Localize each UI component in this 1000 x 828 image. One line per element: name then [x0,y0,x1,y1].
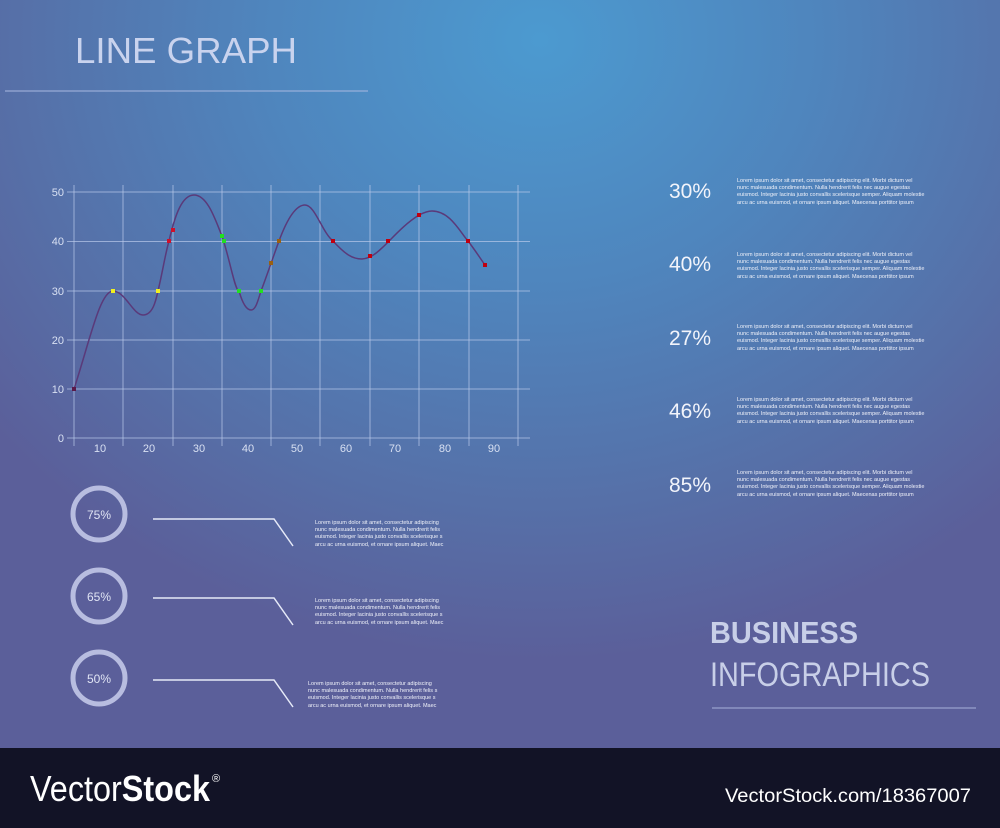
stat 30%: arcu ac urna euismod, et ornare ipsum aliquet. Maecenas porttitor ipsum [737,200,914,206]
stat 40%: euismod. Integer lacinia justo convallis scelerisque semper. Aliquam molestie [737,266,924,272]
stat 40%: nunc malesuada condimentum. Nulla hendrerit felis nec augue egestas [737,259,910,265]
circle item 50% [73,652,438,709]
stat 85% [669,470,924,498]
circle item 65%: Lorem ipsum dolor sit amet, consectetur adipiscing [315,598,439,604]
stat 27%: nunc malesuada condimentum. Nulla hendrerit felis nec augue egestas [737,331,910,337]
stat 40%: Lorem ipsum dolor sit amet, consectetur adipiscing elit. Morbi dictum vel [737,252,912,258]
stat 40%: 40% [669,253,711,276]
y axis labels: 0 [58,433,64,445]
circle item 75% [73,488,444,548]
x axis labels: 40 [242,443,254,455]
business infographics heading: INFOGRAPHICS [710,656,930,694]
business infographics heading: BUSINESS [710,615,858,650]
stat 27%: Lorem ipsum dolor sit amet, consectetur adipiscing elit. Morbi dictum vel [737,324,912,330]
circle item 65%: arcu ac urna euismod, et ornare ipsum aliquet. Maec [315,620,444,626]
circle item 65% [73,570,444,626]
stat 46%: 46% [669,400,711,423]
x axis labels: 50 [291,443,303,455]
circle item 65%: 65% [87,590,111,604]
stat 46%: arcu ac urna euismod, et ornare ipsum aliquet. Maecenas porttitor ipsum [737,419,914,425]
stat 85%: arcu ac urna euismod, et ornare ipsum aliquet. Maecenas porttitor ipsum [737,492,914,498]
line chart [52,185,530,455]
y axis labels: 30 [52,286,64,298]
circle item 65%: nunc malesuada condimentum. Nulla hendrerit felis [315,605,440,611]
stat 27%: euismod. Integer lacinia justo convallis scelerisque semper. Aliquam molestie [737,338,924,344]
footer bar: VectorStock [30,768,211,809]
stat 30% [669,178,924,206]
y axis labels: 20 [52,335,64,347]
x axis labels: 20 [143,443,155,455]
stat 46% [669,397,924,425]
stat 27% [669,324,924,352]
footer bar: ® [212,773,220,785]
footer bar: VectorStock.com/18367007 [725,786,971,807]
stat 30%: euismod. Integer lacinia justo convallis scelerisque semper. Aliquam molestie [737,192,924,198]
stat 27%: 27% [669,327,711,350]
stat 30%: 30% [669,180,711,203]
circle item 50%: 50% [87,672,111,686]
stat 30%: Lorem ipsum dolor sit amet, consectetur adipiscing elit. Morbi dictum vel [737,178,912,184]
stat 30%: nunc malesuada condimentum. Nulla hendrerit felis nec augue egestas [737,185,910,191]
x axis labels: 10 [94,443,106,455]
circle item 65%: euismod. Integer lacinia justo convallis scelerisque s [315,612,443,618]
x axis labels: 70 [389,443,401,455]
y axis labels: 10 [52,384,64,396]
footer bar [0,748,1000,828]
data points [72,213,487,391]
stat 46%: Lorem ipsum dolor sit amet, consectetur adipiscing elit. Morbi dictum vel [737,397,912,403]
y axis labels: 50 [52,187,64,199]
stat 40%: arcu ac urna euismod, et ornare ipsum aliquet. Maecenas porttitor ipsum [737,274,914,280]
business infographics heading [710,615,976,708]
y axis labels: 40 [52,236,64,248]
circle item 50%: euismod. Integer lacinia justo convallis scelerisque s [308,695,436,701]
circle item 75%: 75% [87,508,111,522]
title: LINE GRAPH [75,30,297,71]
y axis labels [52,187,64,445]
circle item 75%: arcu ac urna euismod, et ornare ipsum aliquet. Maec [315,542,444,548]
stat 40% [669,252,924,280]
stat 85%: Lorem ipsum dolor sit amet, consectetur adipiscing elit. Morbi dictum vel [737,470,912,476]
x axis labels: 90 [488,443,500,455]
circle item 75%: Lorem ipsum dolor sit amet, consectetur adipiscing [315,520,439,526]
x axis labels: 80 [439,443,451,455]
stat 85%: nunc malesuada condimentum. Nulla hendrerit felis nec augue egestas [737,477,910,483]
x axis labels [94,443,500,455]
curve [74,195,485,389]
stat 46%: nunc malesuada condimentum. Nulla hendrerit felis nec augue egestas [737,404,910,410]
x axis labels: 60 [340,443,352,455]
circle item 75%: nunc malesuada condimentum. Nulla hendrerit felis [315,527,440,533]
stat 85%: euismod. Integer lacinia justo convallis scelerisque semper. Aliquam molestie [737,484,924,490]
stat 46%: euismod. Integer lacinia justo convallis scelerisque semper. Aliquam molestie [737,411,924,417]
circle item 75%: euismod. Integer lacinia justo convallis scelerisque s [315,534,443,540]
stat 85%: 85% [669,474,711,497]
circle item 50%: arcu ac urna euismod, et ornare ipsum aliquet. Maec [308,703,437,709]
circle item 50%: Lorem ipsum dolor sit amet, consectetur adipiscing [308,681,432,687]
circle item 50%: nunc malesuada condimentum. Nulla hendrerit felis s [308,688,438,694]
x axis labels: 30 [193,443,205,455]
stat 27%: arcu ac urna euismod, et ornare ipsum aliquet. Maecenas porttitor ipsum [737,346,914,352]
